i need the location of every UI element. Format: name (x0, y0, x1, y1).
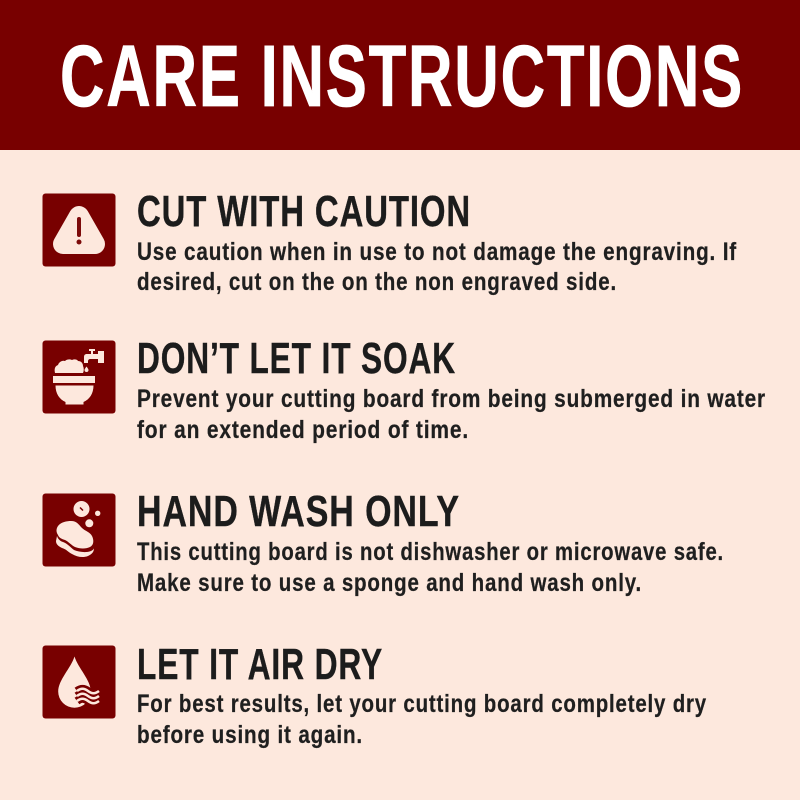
section: cut with caution (42, 187, 737, 296)
section: let it air dry (42, 640, 707, 749)
icon: warning triangle (42, 194, 116, 266)
icon: bowl under faucet (42, 340, 116, 414)
heading: HAND WASH ONLY (137, 487, 460, 536)
description (137, 690, 707, 749)
section: hand wash only (42, 487, 724, 597)
description (137, 385, 766, 444)
heading: DON’T LET IT SOAK (137, 334, 456, 383)
section: don't let it soak (42, 334, 766, 444)
description: for an extended period of time. (137, 416, 469, 444)
description: desired, cut on the on the non engraved side. (137, 268, 617, 296)
header banner (0, 0, 800, 150)
description: before using it again. (137, 721, 363, 749)
icon: water drop with air waves (42, 646, 116, 718)
heading: CUT WITH CAUTION (137, 187, 471, 236)
heading: LET IT AIR DRY (137, 640, 383, 689)
description: Make sure to use a sponge and hand wash only. (137, 569, 642, 597)
description (137, 238, 737, 296)
description (137, 538, 724, 597)
icon: sponge and bubbles (42, 494, 116, 566)
